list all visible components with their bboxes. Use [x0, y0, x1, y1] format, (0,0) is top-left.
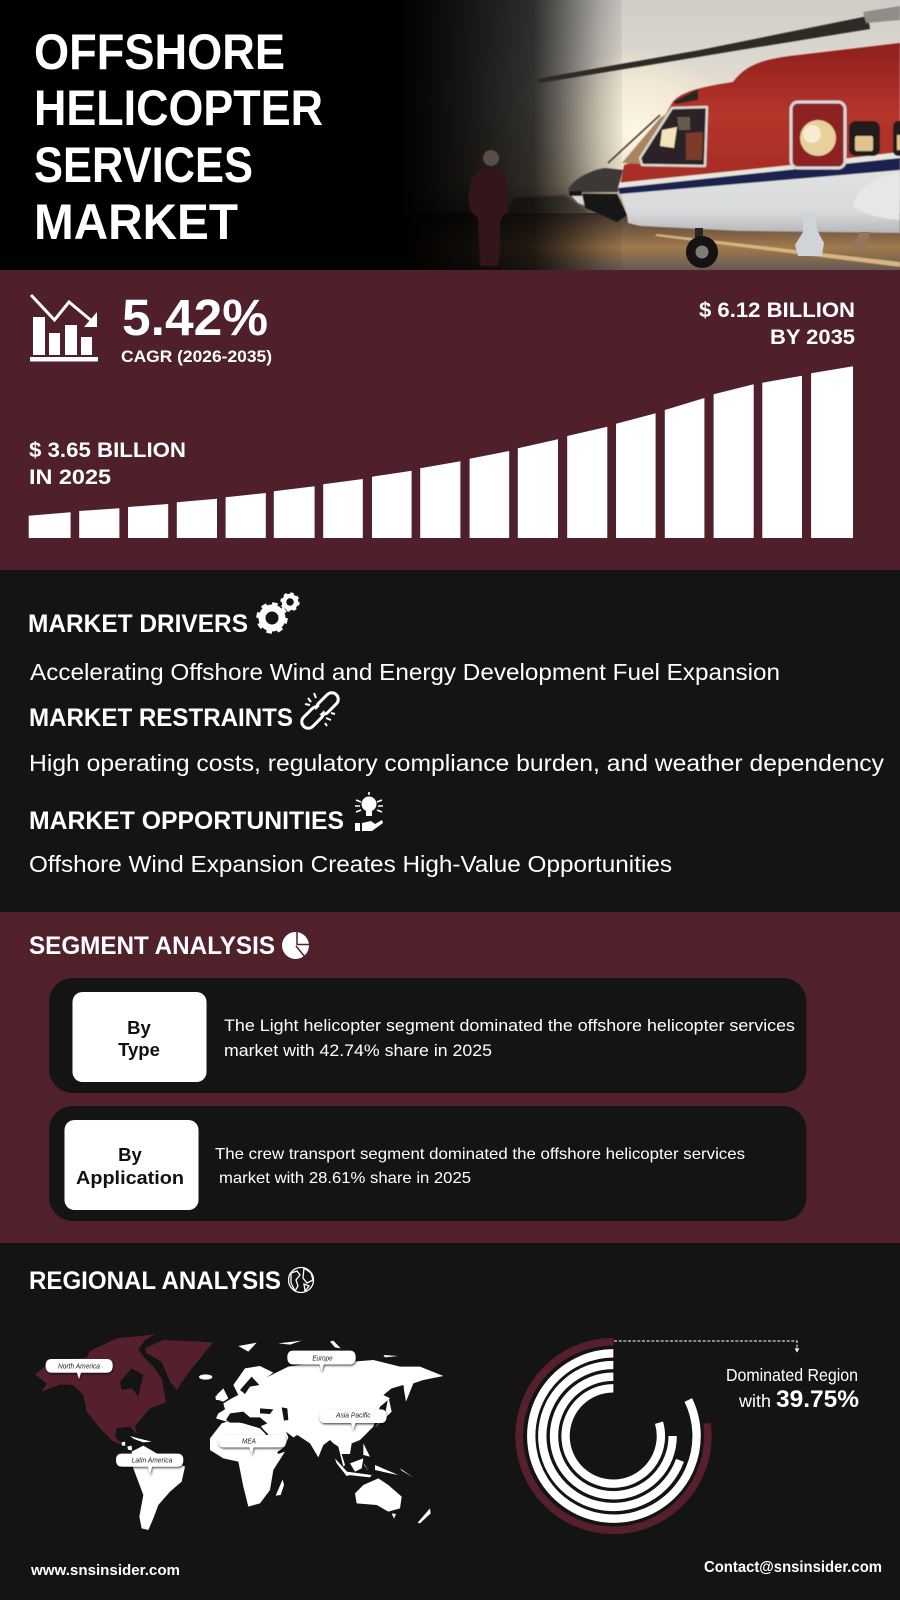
text: by type [224, 1017, 795, 1060]
bar chart: market growth [29, 366, 853, 538]
card: by type [49, 978, 806, 1093]
heading: segment analysis: SEGMENT ANALYSIS [29, 932, 275, 960]
footer: email: Contact@snsinsider.com [704, 1559, 882, 1576]
radial bar chart [519, 1341, 799, 1530]
heading: market drivers: MARKET DRIVERS [28, 610, 248, 638]
text: by application: market with 28.61% share in 2025 [219, 1170, 471, 1187]
person on the helipad [468, 150, 508, 266]
title: OFFSHORE [34, 24, 285, 80]
panel: drivers restraints opportunities [0, 570, 900, 912]
2025 value: IN 2025 [29, 466, 111, 489]
callout: europe [287, 1351, 356, 1372]
cabin windows [849, 121, 880, 156]
callout: dominated region: 39.75% [776, 1386, 859, 1413]
icon: gears [258, 594, 298, 632]
heading: market restraints: MARKET RESTRAINTS [29, 704, 293, 732]
callout: asia pacific: Asia Pacific [335, 1413, 371, 1420]
text: by type: The Light helicopter segment dominated the offshore helicopter services [224, 1017, 795, 1035]
callout: dominated region: Dominated Region [726, 1365, 858, 1385]
dashed leader arrow [614, 1341, 799, 1353]
callout: europe: Europe [312, 1356, 333, 1363]
card: by application [49, 1106, 806, 1221]
icon: pie chart [282, 932, 310, 959]
text: driver: Accelerating Offshore Wind and Energy Development Fuel Expansion [30, 659, 780, 685]
callout: asia pacific [319, 1409, 387, 1430]
eurasia africa and oceania [210, 1341, 443, 1523]
callout: north america: North America [58, 1363, 100, 1370]
heading: market opportunities: MARKET OPPORTUNITIES [29, 807, 344, 835]
helicopter photo [400, 0, 900, 270]
label box: by application [64, 1120, 198, 1210]
windshield [622, 114, 666, 165]
rotor blade [536, 6, 900, 83]
panel: segment analysis [0, 912, 900, 1243]
label box: by type: Type [118, 1039, 160, 1060]
2035 value: BY 2035 [770, 326, 855, 349]
callout: latin america: Latin America [132, 1458, 172, 1465]
latin america and caribbean [122, 1374, 220, 1530]
title: SERVICES [34, 137, 253, 193]
header banner [0, 0, 900, 270]
north america highlighted [35, 1334, 213, 1446]
text: restraint: High operating costs, regulatory compliance burden, and weather dependency [29, 750, 885, 776]
world map [35, 1334, 443, 1530]
heading: regional analysis: REGIONAL ANALYSIS [29, 1267, 281, 1295]
label box: by type: By [127, 1017, 152, 1038]
CAGR label: CAGR (2026-2035) [121, 347, 272, 366]
label box: by application: By [118, 1144, 143, 1165]
text: by application [215, 1146, 745, 1187]
map callouts [46, 1351, 387, 1475]
callout: north america [46, 1359, 113, 1379]
callout: latin america [116, 1454, 183, 1475]
icon: broken chain [299, 690, 341, 731]
footer: website: www.snsinsider.com [30, 1562, 180, 1579]
panel: market size [0, 270, 900, 570]
label box: by type [72, 992, 206, 1082]
2035 value: $ 6.12 BILLION [699, 299, 855, 322]
2035 value [699, 299, 855, 349]
2025 value: $ 3.65 BILLION [29, 439, 186, 462]
icon: idea in hand [355, 792, 383, 831]
nose cone [568, 168, 623, 192]
landing gear [686, 220, 870, 268]
callout: dominated region: with [738, 1391, 771, 1411]
callout: dominated region [726, 1365, 859, 1413]
callout: mea: MEA [242, 1438, 256, 1445]
helicopter fuselage [568, 43, 900, 233]
inland seas [226, 1377, 288, 1427]
icon: globe [288, 1268, 314, 1292]
label box: by application: Application [76, 1167, 184, 1188]
title: MARKET [34, 194, 238, 250]
cockpit window [640, 107, 707, 166]
callout: mea [218, 1435, 286, 1455]
title [34, 24, 323, 250]
2025 value [29, 439, 186, 489]
icon: declining chart [30, 295, 98, 362]
title: HELICOPTER [34, 80, 323, 136]
text: by type: market with 42.74% share in 2025 [224, 1042, 492, 1060]
CAGR value: 5.42% [122, 289, 268, 346]
cabin door window [791, 102, 845, 168]
text: by application: The crew transport segment dominated the offshore helicopter services [215, 1146, 745, 1163]
text: opportunity: Offshore Wind Expansion Creates High-Value Opportunities [29, 851, 672, 877]
